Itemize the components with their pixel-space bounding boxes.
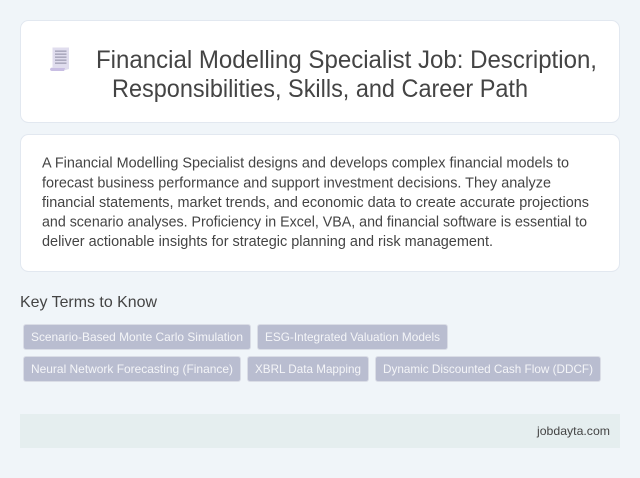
chip: Dynamic Discounted Cash Flow (DDCF): Dynamic Discounted Cash Flow (DDCF) (383, 362, 593, 376)
chip: ESG-Integrated Valuation Models: ESG-Integrated Valuation Models (265, 330, 440, 344)
description text: forecast business performance and support investment decisions. They analyze (42, 176, 551, 192)
chip: Scenario-Based Monte Carlo Simulation (24, 324, 250, 350)
panel: description card (20, 134, 620, 272)
title (96, 46, 597, 103)
title: Financial Modelling Specialist Job: Description, (96, 46, 597, 74)
title: Responsibilities, Skills, and Career Path (112, 75, 528, 103)
chip: Neural Network Forecasting (Finance): Neural Network Forecasting (Finance) (31, 362, 233, 376)
chip: ESG-Integrated Valuation Models (258, 324, 448, 350)
icon: document scroll (50, 48, 69, 71)
chip: XBRL Data Mapping (248, 356, 368, 382)
heading: key terms: Key Terms to Know (20, 294, 157, 311)
description text (42, 156, 589, 250)
description text: and scenario analyses. Proficiency in Excel, VBA, and financial software is essential to (42, 214, 587, 230)
chip: Scenario-Based Monte Carlo Simulation: Scenario-Based Monte Carlo Simulation (31, 330, 243, 344)
description text: deliver actionable insights for strategic planning and risk management. (42, 234, 493, 250)
footer bar: jobdayta.com (536, 424, 610, 438)
chip: Neural Network Forecasting (Finance) (24, 356, 240, 382)
chip: Dynamic Discounted Cash Flow (DDCF) (376, 356, 600, 382)
description text: A Financial Modelling Specialist designs and develops complex financial models to (42, 156, 569, 172)
description text: financial statements, market trends, and economic data to create accurate projections (42, 195, 589, 211)
chip: XBRL Data Mapping: XBRL Data Mapping (255, 362, 361, 376)
footer bar (20, 414, 620, 448)
panel: title card (20, 20, 620, 122)
